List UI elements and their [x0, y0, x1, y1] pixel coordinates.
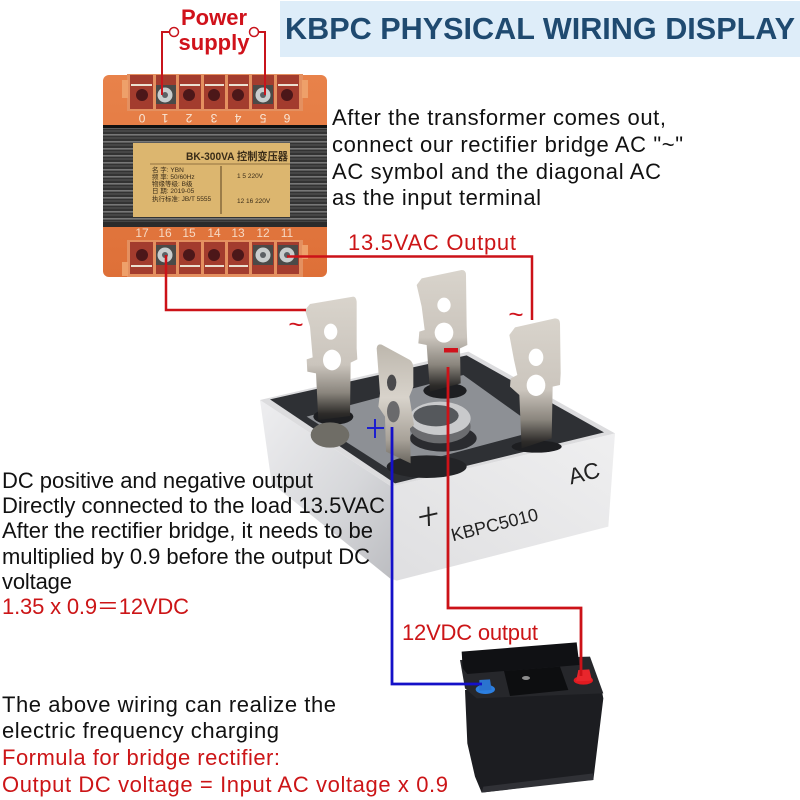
AC symbols: ~	[288, 309, 304, 339]
power supply label: Power	[181, 5, 247, 30]
nameplate: BK-300VA 控制变压器	[186, 149, 288, 163]
center mounting hole	[409, 402, 471, 443]
top terminal strip	[122, 74, 308, 111]
transformer instructions text: connect our rectifier bridge AC "~"	[332, 132, 683, 157]
negative marker	[444, 348, 458, 352]
nameplate: 执行标准: JB/T 5555	[152, 194, 212, 203]
bridge rectifier KBPC5010	[260, 270, 615, 581]
positive marker	[367, 419, 384, 438]
left explanatory text: Directly connected to the load 13.5VAC	[2, 493, 385, 518]
left explanatory text: After the rectifier bridge, it needs to be	[2, 518, 373, 543]
left explanatory text: DC positive and negative output	[2, 468, 313, 493]
bottom terminal numbers: 16	[158, 226, 172, 240]
nameplate: 名 字: YBN	[152, 165, 184, 174]
transformer instructions text: AC symbol and the diagonal AC	[332, 159, 661, 184]
wire: AC from terminal 16	[166, 255, 306, 310]
transformer instructions text: as the input terminal	[332, 185, 541, 210]
wire: AC from terminal 11	[287, 256, 532, 320]
bottom terminal numbers: 15	[182, 226, 196, 240]
bottom terminal strip	[122, 240, 308, 277]
battery handle	[462, 642, 579, 674]
case marking AC: AC	[566, 456, 602, 489]
nameplate: 12 16 220V	[237, 198, 271, 205]
left explanatory text: 1.35 x 0.9＝12VDC	[2, 594, 189, 619]
wire: DC positive blue	[392, 427, 482, 684]
nameplate	[133, 143, 290, 217]
positive terminal	[574, 669, 593, 685]
top terminal numbers: 5	[259, 111, 266, 125]
bottom terminal numbers: 11	[281, 226, 294, 240]
potting blobs	[311, 383, 562, 478]
negative terminal	[476, 679, 495, 694]
bottom explanatory text: Formula for bridge rectifier:	[2, 745, 280, 770]
bridge recess	[270, 355, 604, 483]
top terminal numbers: 4	[234, 111, 241, 125]
left explanatory text: voltage	[2, 569, 72, 594]
left explanatory text	[2, 468, 385, 619]
bottom explanatory text	[2, 692, 448, 797]
bottom explanatory text: Output DC voltage = Input AC voltage x 0.9	[2, 772, 448, 797]
bridge top rim	[260, 352, 615, 487]
transformer orange body	[103, 75, 327, 277]
transformer	[103, 74, 327, 277]
battery top ledge	[460, 657, 603, 698]
top terminal numbers: 0	[138, 111, 145, 125]
top terminal numbers: 6	[283, 111, 290, 125]
AC symbols: ~	[508, 299, 524, 329]
power supply label	[179, 5, 250, 55]
title banner: KBPC PHYSICAL WIRING DISPLAY	[285, 11, 795, 46]
case marking plus	[419, 507, 437, 526]
case marking model: KBPC5010	[449, 504, 540, 545]
battery cap	[504, 667, 568, 696]
AC pin left	[305, 297, 357, 420]
nameplate: 日 期: 2019-05	[152, 187, 195, 195]
bottom explanatory text: The above wiring can realize the	[2, 692, 336, 717]
nameplate: 物缘等级: B级	[152, 179, 193, 188]
top terminal numbers	[138, 111, 290, 125]
bottom terminal numbers: 13	[231, 226, 245, 240]
battery	[460, 642, 603, 793]
AC symbols	[288, 299, 524, 339]
title banner	[280, 1, 800, 57]
DC output label: 12VDC output	[402, 620, 538, 645]
negative pin	[417, 270, 467, 392]
bottom terminal numbers	[135, 226, 294, 240]
bottom terminal numbers: 17	[135, 226, 149, 240]
power supply label: supply	[179, 30, 250, 55]
bottom terminal numbers: 14	[207, 226, 221, 240]
left explanatory text: multiplied by 0.9 before the output DC	[2, 544, 370, 569]
nameplate: 频 率: 50/60Hz	[152, 172, 195, 181]
battery base ribs	[482, 773, 593, 793]
bottom terminal numbers: 12	[256, 226, 270, 240]
bottom explanatory text: electric frequency charging	[2, 718, 279, 743]
power supply wires	[162, 28, 265, 95]
transformer laminated core	[103, 125, 327, 227]
top terminal numbers: 1	[161, 111, 168, 125]
AC pin right	[509, 318, 561, 448]
transformer instructions text: After the transformer comes out,	[332, 105, 666, 130]
top terminal numbers: 3	[210, 111, 217, 125]
wire: DC negative red	[448, 367, 581, 676]
top terminal numbers: 2	[185, 111, 192, 125]
battery body	[465, 690, 603, 793]
bridge front side	[390, 433, 615, 581]
transformer instructions text	[332, 105, 683, 210]
nameplate: 1 5 220V	[237, 173, 264, 180]
bridge left side	[260, 400, 392, 578]
positive pin	[377, 344, 414, 463]
AC output label: 13.5VAC Output	[348, 230, 516, 255]
